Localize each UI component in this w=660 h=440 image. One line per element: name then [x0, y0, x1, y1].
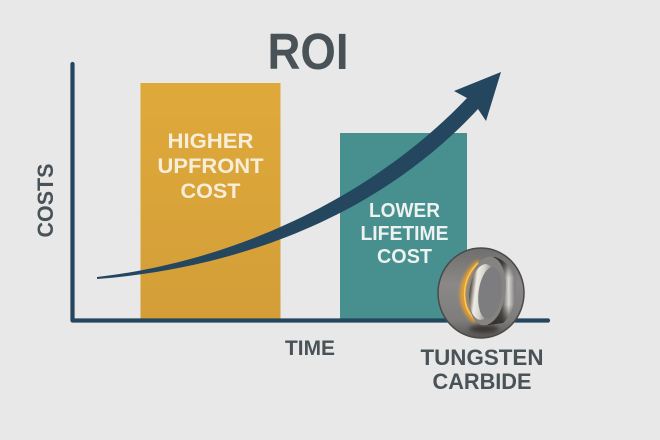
ring front rim: [464, 255, 510, 327]
growth arrow: [97, 72, 501, 279]
chart axes: [72, 64, 548, 320]
bar label: lower lifetime cost: [360, 199, 448, 268]
ring inner silver band: [466, 263, 500, 321]
ring label: tungsten carbide: [420, 345, 544, 394]
bar label: lower lifetime cost: LIFETIME: [360, 222, 448, 245]
bar: lower lifetime cost: [340, 133, 467, 320]
bar label: higher upfront cost: UPFRONT: [158, 154, 264, 178]
orange glow: [463, 262, 479, 321]
x axis label: TIME: [285, 337, 335, 360]
back band of ring: [488, 257, 515, 325]
bar label: higher upfront cost: HIGHER: [168, 129, 254, 153]
title: ROI: [268, 23, 348, 80]
ring label: tungsten carbide: CARBIDE: [432, 369, 532, 394]
bar label: lower lifetime cost: LOWER: [369, 199, 440, 222]
ring inner grey face: [475, 266, 505, 320]
bar label: higher upfront cost: COST: [180, 179, 240, 203]
bar label: lower lifetime cost: COST: [377, 245, 432, 268]
icon: tungsten carbide ring: [438, 248, 524, 338]
bar: higher upfront cost: [140, 83, 280, 320]
y axis label: COSTS: [33, 164, 58, 238]
bar label: higher upfront cost: [158, 129, 264, 203]
bottom shadow: [469, 325, 499, 333]
ring label: tungsten carbide: TUNGSTEN: [420, 345, 544, 370]
